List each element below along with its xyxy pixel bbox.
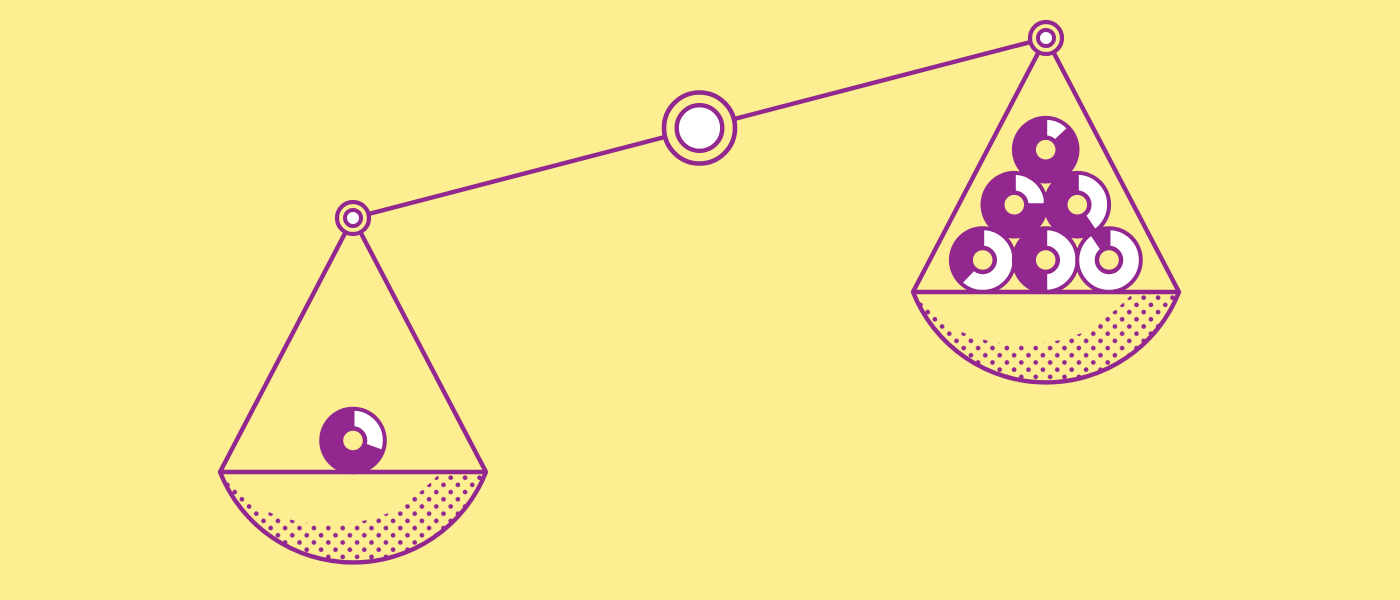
- scale beam: [353, 38, 1046, 218]
- donut weight: bottom middle: [1012, 226, 1080, 294]
- left pan donut weight: [319, 407, 387, 474]
- left pan hanger and bowl: [220, 218, 486, 562]
- left pan: [220, 218, 486, 562]
- right pan dotted shading: [913, 292, 1179, 382]
- central pivot: [664, 92, 735, 164]
- right pan: [913, 38, 1179, 382]
- donut weight: bottom left: [949, 226, 1016, 294]
- donut weight: middle left: [980, 171, 1048, 238]
- left hanger ring: [337, 202, 369, 234]
- left pan dotted shading: [220, 472, 486, 562]
- donut weight: bottom right: [1075, 226, 1143, 294]
- right pan donut weights stack: [949, 116, 1143, 294]
- donut weight: middle right: [1044, 171, 1111, 238]
- right pan hanger and bowl: [913, 38, 1179, 382]
- donut weight: top: [1012, 116, 1080, 184]
- right hanger ring: [1030, 22, 1062, 54]
